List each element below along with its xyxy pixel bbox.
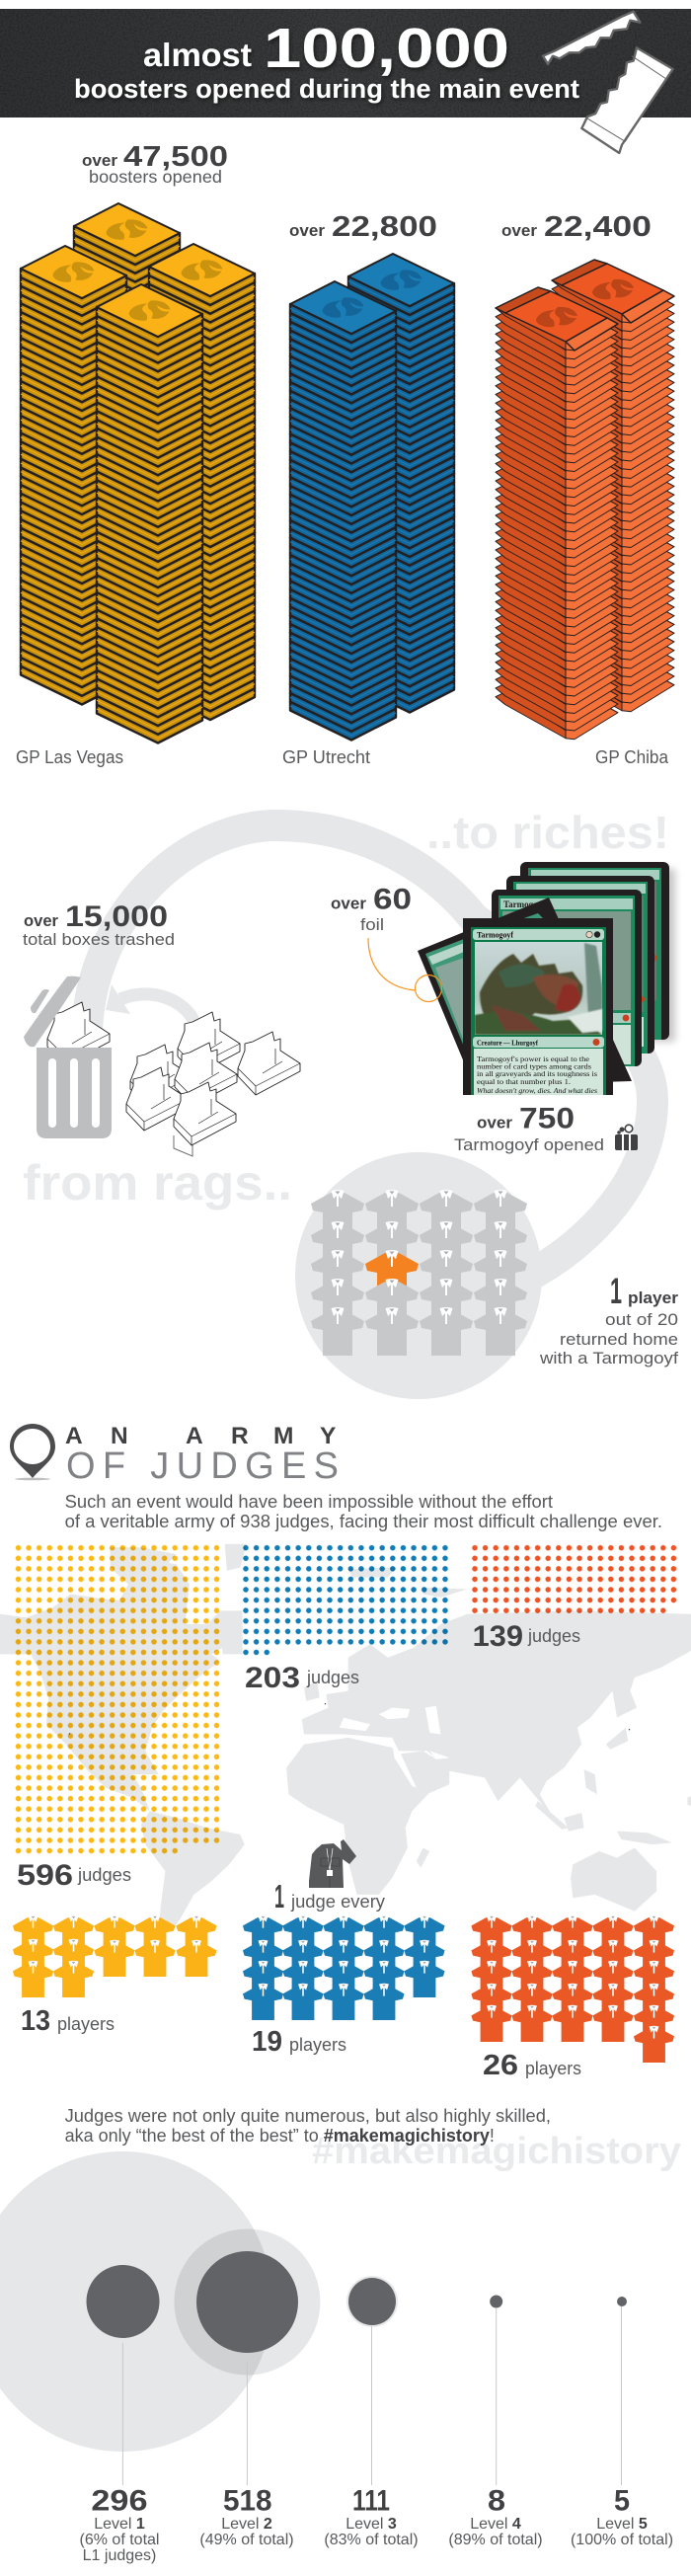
level 2 label: 518 [223, 2485, 272, 2518]
level 5 label [571, 2485, 673, 2548]
13 players label: 13 [21, 2005, 50, 2037]
banner headline [74, 17, 579, 104]
level 1 label: Level 1 [94, 2516, 145, 2533]
makemagichistory watermark: #makemagichistory [312, 2131, 681, 2172]
boxes trashed text: 15,000 [65, 900, 168, 933]
gold judge dots [13, 1542, 222, 1856]
Las Vegas count: 47,500 [123, 141, 228, 173]
203 judges label: 203 [245, 1662, 300, 1694]
blue judge dots [241, 1542, 450, 1658]
front card: Creature — Lhurgoyf [477, 1039, 538, 1047]
one player text: player [628, 1288, 678, 1307]
africa [286, 1738, 434, 1895]
seas [379, 1707, 410, 1719]
one judge every text: judge every [290, 1892, 385, 1912]
one judge every text: 1 [274, 1878, 284, 1914]
level 4 label: 8 [488, 2485, 505, 2518]
event labels: GP Chiba [595, 747, 669, 767]
foil callout [368, 938, 442, 1001]
level 4 label [448, 2485, 543, 2548]
26 players label: 26 [483, 2050, 518, 2081]
Utrecht count [289, 211, 437, 243]
139 judges label [473, 1620, 580, 1653]
boxes trashed text: total boxes trashed [23, 930, 175, 949]
Las Vegas count: boosters opened [89, 167, 222, 187]
icon: trash can [24, 976, 112, 1138]
19 players label: 19 [252, 2026, 282, 2058]
13 players label [21, 2005, 115, 2037]
panel: boosters opened per event [16, 141, 674, 767]
gold booster stacks [21, 203, 255, 742]
19 players label: players [289, 2035, 346, 2055]
level 2 label: Level 2 [221, 2516, 272, 2533]
total judges halos [0, 2151, 398, 2452]
location specks [69, 1703, 630, 1735]
panel: army of judges [0, 1423, 691, 2081]
one player text: with a Tarmogoyf [539, 1349, 678, 1367]
arrow into trash [106, 984, 194, 1022]
event labels: GP Utrecht [282, 747, 370, 767]
Tarmogoyf opened text: over [477, 1114, 512, 1132]
level 5 label: (100% of total) [571, 2532, 673, 2548]
one player text: returned home [560, 1330, 678, 1349]
level 3 label [324, 2485, 419, 2548]
Chiba count [501, 211, 652, 243]
level 2 label [199, 2485, 294, 2548]
icon: box in trash [47, 1002, 110, 1065]
banner headline: boosters opened during the main event [74, 74, 579, 104]
Utrecht count: 22,800 [332, 211, 437, 243]
levels intro paragraph: Judges were not only quite numerous, but also highly skilled, [65, 2106, 551, 2126]
Tarmogoyf cards [418, 862, 675, 1095]
Chiba count: over [501, 221, 537, 240]
intro paragraph: of a veritable army of 938 judges, facing their most difficult challenge ever. [65, 1512, 662, 1531]
front card: Tarmogoyf [477, 930, 513, 940]
player shirts grid [311, 1190, 527, 1356]
Tarmogoyf opened text: 750 [519, 1102, 575, 1135]
rear card 1 [520, 862, 669, 1040]
level 5 label: 5 [614, 2485, 630, 2518]
orange shirts [471, 1915, 674, 2063]
to riches watermark: ..to riches! [426, 807, 669, 858]
level 1 label [80, 2485, 159, 2564]
event labels [16, 747, 669, 767]
banner headline: 100,000 [264, 17, 509, 80]
level 4 label: (89% of total) [448, 2532, 543, 2548]
icon: location pin [10, 1424, 55, 1480]
panel: from rags to riches [23, 807, 678, 1399]
level 5 label: Level 5 [596, 2516, 648, 2533]
oceania [571, 1847, 656, 1912]
203 judges label: judges [306, 1668, 359, 1687]
icon: pile of boxes [126, 1012, 300, 1156]
banner headline: almost [143, 37, 252, 73]
596 judges label: judges [77, 1865, 131, 1885]
swoosh arc [87, 825, 653, 1279]
heading [10, 1423, 339, 1487]
large circle [295, 1152, 542, 1399]
icon: torn booster pack [543, 12, 673, 153]
139 judges label: judges [527, 1626, 580, 1646]
level 1 label: (6% of total [80, 2532, 159, 2548]
rear card 3 [492, 890, 642, 1066]
icon: gift [615, 1125, 638, 1150]
596 judges label: 596 [17, 1859, 73, 1892]
intro paragraph [65, 1492, 662, 1531]
26 players label [483, 2050, 581, 2081]
596 judges label [17, 1859, 131, 1892]
boxes trashed text: over [24, 911, 58, 930]
Tarmogoyf opened text: Tarmogoyf opened [454, 1135, 604, 1154]
boxes trashed text [23, 900, 175, 949]
south america [141, 1811, 245, 1931]
card art creature [475, 943, 602, 1035]
icon: judge [309, 1839, 356, 1888]
from rags watermark: from rags.. [23, 1155, 292, 1210]
Las Vegas count: over [82, 151, 117, 170]
level 2 label: (49% of total) [199, 2532, 294, 2548]
foil text [331, 883, 412, 934]
13 players label: players [57, 2014, 115, 2034]
title line two: OF JUDGES [66, 1445, 339, 1487]
level 1 label: 296 [91, 2485, 148, 2518]
level 1 label: L1 judges) [83, 2547, 156, 2564]
foil text: 60 [373, 883, 412, 916]
foil text: over [331, 895, 366, 912]
card rules text: number of card types among cards [477, 1062, 591, 1070]
levels intro paragraph: aka only “the best of the best” to #makemagichistory! [65, 2126, 495, 2146]
front card [463, 918, 613, 1095]
card rules text: equal to that number plus 1. [477, 1078, 571, 1086]
world map [0, 1544, 691, 1931]
eurasia [302, 1610, 691, 1821]
intro paragraph: Such an event would have been impossible without the effort [65, 1492, 553, 1512]
blue booster stacks [290, 254, 454, 741]
rear card 2 [506, 876, 654, 1054]
blue shirts [243, 1915, 445, 2020]
gold shirts [13, 1915, 217, 1997]
panel: judge levels [0, 2106, 681, 2564]
level bubbles [87, 2251, 627, 2353]
card rules text: Tarmogoyf's power is equal to the [477, 1055, 589, 1063]
level 3 label: Level 3 [346, 2516, 397, 2533]
north america [0, 1561, 231, 1811]
orange booster stacks [496, 260, 674, 740]
139 judges label: 139 [473, 1620, 523, 1653]
levels intro paragraph [65, 2106, 551, 2146]
one player text: out of 20 [605, 1310, 678, 1329]
26 players label: players [525, 2059, 581, 2078]
title line one: AN ARMY [65, 1423, 336, 1449]
card rules text: in all graveyards and its toughness is [477, 1070, 597, 1078]
banner [0, 9, 691, 153]
tilted foil card [418, 898, 632, 1086]
Chiba count: 22,400 [544, 211, 652, 243]
orange judge dots [470, 1542, 679, 1615]
one player text [539, 1271, 678, 1367]
card rules text: What doesn't grow, dies. And what dies [477, 1087, 597, 1095]
Utrecht count: over [289, 221, 325, 240]
level 4 label: Level 4 [470, 2516, 521, 2533]
level 3 label: 111 [352, 2485, 390, 2518]
connector lines [122, 2306, 622, 2485]
event labels: GP Las Vegas [16, 747, 123, 767]
rear card 3: Tarmogoyf [503, 899, 546, 909]
card rules text [477, 1055, 597, 1095]
19 players label [252, 2026, 346, 2058]
one judge every text [274, 1878, 385, 1914]
Las Vegas count [82, 141, 228, 187]
one player text: 1 [610, 1271, 622, 1311]
level 3 label: (83% of total) [324, 2532, 419, 2548]
203 judges label [245, 1662, 359, 1694]
Tarmogoyf opened text [454, 1102, 604, 1154]
foil text: foil [360, 915, 384, 934]
